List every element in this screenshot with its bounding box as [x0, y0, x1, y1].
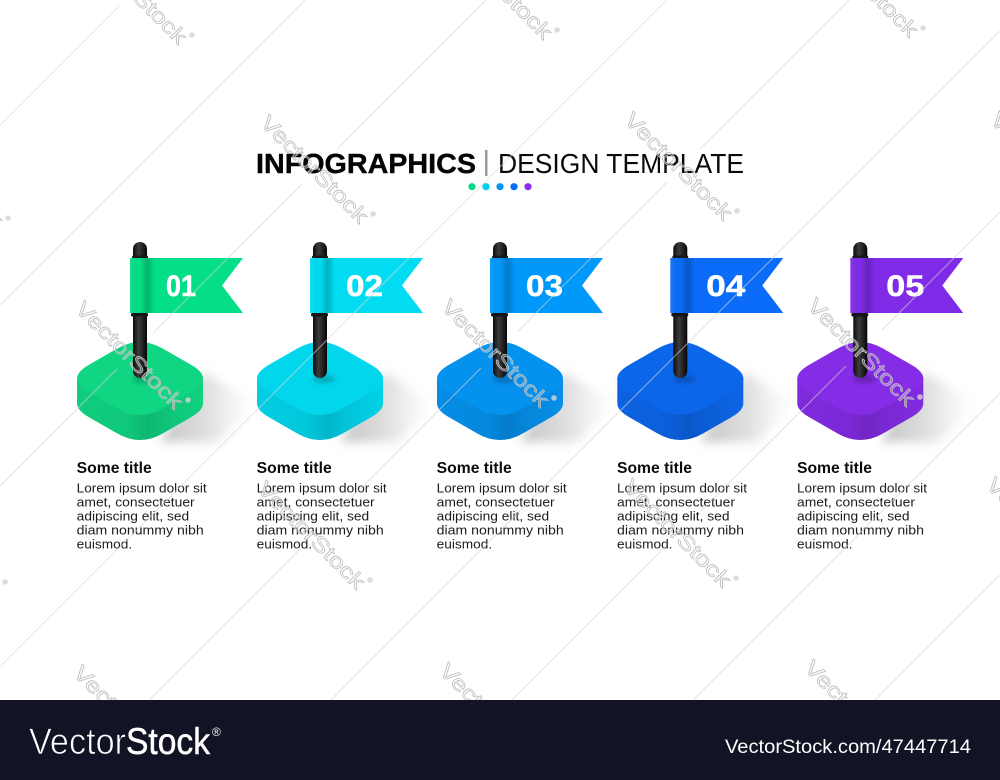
- flag pole: [131, 242, 155, 383]
- flag: [850, 258, 963, 313]
- step text: diam nonummy nibh: [797, 523, 924, 537]
- flag pole: [851, 242, 875, 383]
- base shadow: [700, 372, 794, 442]
- flag: [670, 258, 783, 313]
- step text: adipiscing elit, sed: [617, 510, 730, 524]
- step text: [437, 460, 567, 551]
- watermark overlay: VectorStock: [799, 656, 917, 773]
- step 1: [77, 242, 254, 551]
- step text: amet, consectetuer: [257, 496, 375, 510]
- step number: 05: [886, 270, 924, 303]
- base shadow: [880, 372, 974, 442]
- step text: Lorem ipsum dolor sit: [257, 482, 387, 496]
- footer logo: Vector: [29, 721, 126, 762]
- step text: Some title: [77, 460, 152, 477]
- flag pole: [311, 242, 335, 383]
- step text: [77, 460, 207, 551]
- watermark overlay: VectorStock: [252, 477, 370, 594]
- watermark overlay: VectorStock: [802, 294, 920, 411]
- watermark overlay: VectorStock: [70, 297, 188, 414]
- step text: euismod.: [617, 537, 672, 551]
- isometric base: [617, 342, 743, 440]
- step text: Some title: [617, 460, 692, 477]
- step text: Lorem ipsum dolor sit: [797, 482, 928, 496]
- step text: amet, consectetuer: [797, 496, 915, 510]
- step text: adipiscing elit, sed: [437, 510, 549, 524]
- step text: amet, consectetuer: [77, 496, 195, 510]
- step text: diam nonummy nibh: [77, 523, 204, 537]
- step text: Lorem ipsum dolor sit: [617, 482, 748, 496]
- footer logo: ®: [212, 725, 221, 739]
- step number: 01: [166, 270, 196, 303]
- flag: [310, 258, 423, 313]
- step text: Lorem ipsum dolor sit: [437, 482, 567, 496]
- base shadow: [160, 372, 254, 442]
- step text: amet, consectetuer: [437, 496, 555, 510]
- step 5: [797, 242, 974, 551]
- isometric base: [797, 342, 923, 440]
- title dots: [468, 183, 532, 190]
- step text: diam nonummy nibh: [257, 523, 384, 537]
- base shadow: [340, 372, 434, 442]
- step number: 02: [346, 270, 383, 303]
- watermark overlay: VectorStock: [619, 108, 737, 225]
- footer bar: [0, 700, 1000, 780]
- step text: euismod.: [77, 537, 132, 551]
- flag: [130, 258, 243, 313]
- isometric base: [77, 342, 203, 440]
- step text: [797, 460, 928, 551]
- step text: adipiscing elit, sed: [257, 510, 369, 524]
- step text: adipiscing elit, sed: [77, 510, 189, 524]
- step text: [257, 460, 387, 551]
- step 4: [617, 242, 794, 551]
- step 2: [257, 242, 434, 551]
- step text: [617, 460, 748, 551]
- footer logo: Stock: [126, 721, 210, 762]
- step text: Some title: [797, 460, 872, 477]
- isometric base: [257, 342, 383, 440]
- watermark overlay: VectorStock: [434, 659, 552, 776]
- step text: euismod.: [437, 537, 492, 551]
- watermark overlay: VectorStock: [618, 475, 736, 592]
- footer logo: [29, 721, 221, 762]
- step text: amet, consectetuer: [617, 496, 735, 510]
- step text: diam nonummy nibh: [617, 523, 744, 537]
- footer url: VectorStock.com/47447714: [725, 736, 971, 758]
- flag: [490, 258, 603, 313]
- title: DESIGN TEMPLATE: [498, 148, 744, 179]
- step number: 03: [526, 270, 563, 303]
- title: [256, 148, 744, 179]
- step number: 04: [706, 270, 746, 303]
- isometric base: [437, 342, 563, 440]
- flag pole: [671, 242, 695, 383]
- title: INFOGRAPHICS: [256, 148, 476, 179]
- step text: euismod.: [797, 537, 852, 551]
- step text: Some title: [257, 460, 332, 477]
- base shadow: [520, 372, 614, 442]
- watermark overlay: VectorStock: [436, 295, 554, 412]
- step text: Lorem ipsum dolor sit: [77, 482, 207, 496]
- watermark overlay: VectorStock: [68, 661, 186, 778]
- watermark overlay: VectorStock: [255, 111, 373, 228]
- flag pole: [491, 242, 515, 383]
- step text: Some title: [437, 460, 512, 477]
- step 3: [437, 242, 614, 551]
- step text: diam nonummy nibh: [437, 523, 564, 537]
- step text: adipiscing elit, sed: [797, 510, 910, 524]
- step text: euismod.: [257, 537, 312, 551]
